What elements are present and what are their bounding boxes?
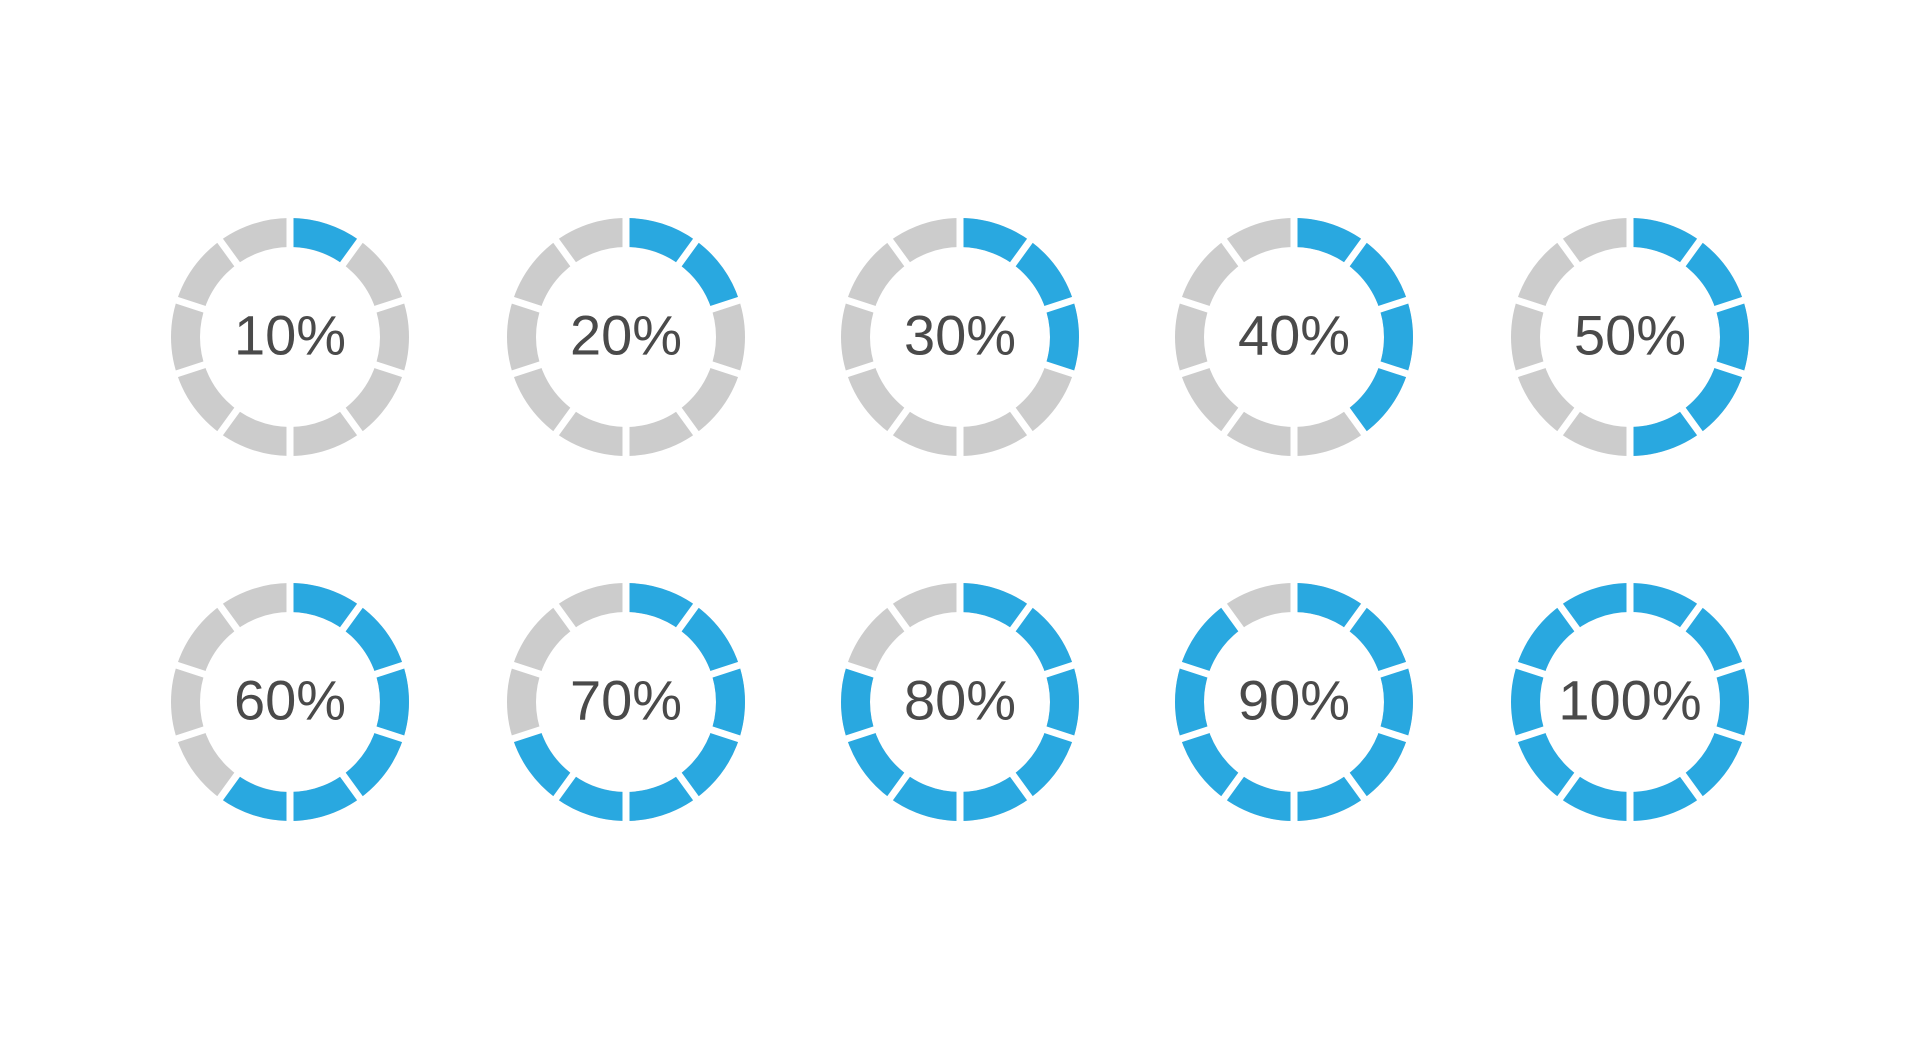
donut: 100% [1506,572,1754,832]
donut: 30% [836,207,1084,467]
donut: 30%: 30% [904,304,1016,366]
donut: 100%: 100% [1558,668,1702,732]
donut: 80% [836,572,1084,832]
donut: 40%: 40% [1238,304,1350,366]
donut: 60%: 60% [234,668,346,732]
donut: 80%: 80% [904,668,1016,732]
donut: 10%: 10% [234,304,346,366]
donut: 40% [1170,207,1418,467]
donut: 50%: 50% [1574,304,1686,366]
donut: 70%: 70% [570,668,682,732]
donut: 20% [502,207,750,467]
donut: 90%: 90% [1238,668,1350,732]
donut: 20%: 20% [570,304,682,366]
donut: 50% [1506,207,1754,467]
donut: 60% [166,572,414,832]
donut: 70% [502,572,750,832]
donut: 10% [166,207,414,467]
donut: 90% [1170,572,1418,832]
